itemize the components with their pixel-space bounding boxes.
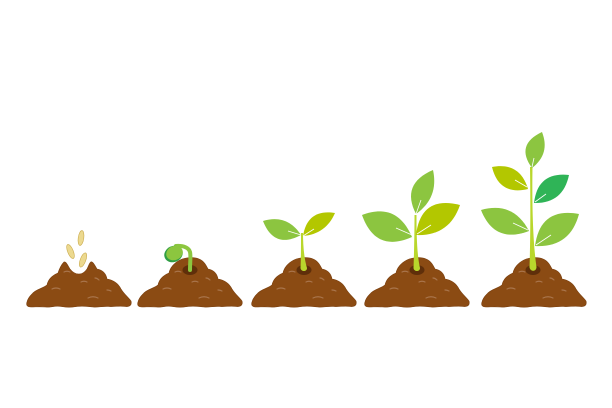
lower left leaf — [481, 208, 529, 235]
soil mound — [365, 258, 469, 307]
seed leaf — [162, 243, 185, 265]
upper left leaf — [492, 166, 528, 190]
right leaf — [303, 212, 335, 236]
stage 5: five leaves — [481, 132, 586, 307]
lower right leaf — [535, 213, 579, 246]
right leaf — [416, 203, 460, 235]
left leaf — [362, 211, 412, 242]
seed left — [65, 243, 76, 260]
sprout stem — [176, 246, 190, 270]
top leaf — [411, 170, 434, 214]
left leaf — [263, 219, 301, 240]
soil mound with notch — [27, 262, 131, 307]
seed right — [78, 252, 88, 268]
stem — [300, 233, 307, 271]
soil mound — [252, 258, 356, 307]
seed top — [77, 230, 85, 246]
stage 2: germinating seed — [138, 243, 242, 307]
stage 1: seeds and soil — [27, 230, 131, 307]
upper right leaf — [534, 175, 569, 203]
stem — [530, 167, 536, 271]
soil mound — [482, 258, 586, 307]
stage 3: two leaves — [252, 212, 356, 307]
top leaf — [525, 132, 545, 168]
stem — [414, 215, 420, 271]
stage 4: three leaves — [362, 170, 469, 307]
soil mound — [138, 258, 242, 307]
